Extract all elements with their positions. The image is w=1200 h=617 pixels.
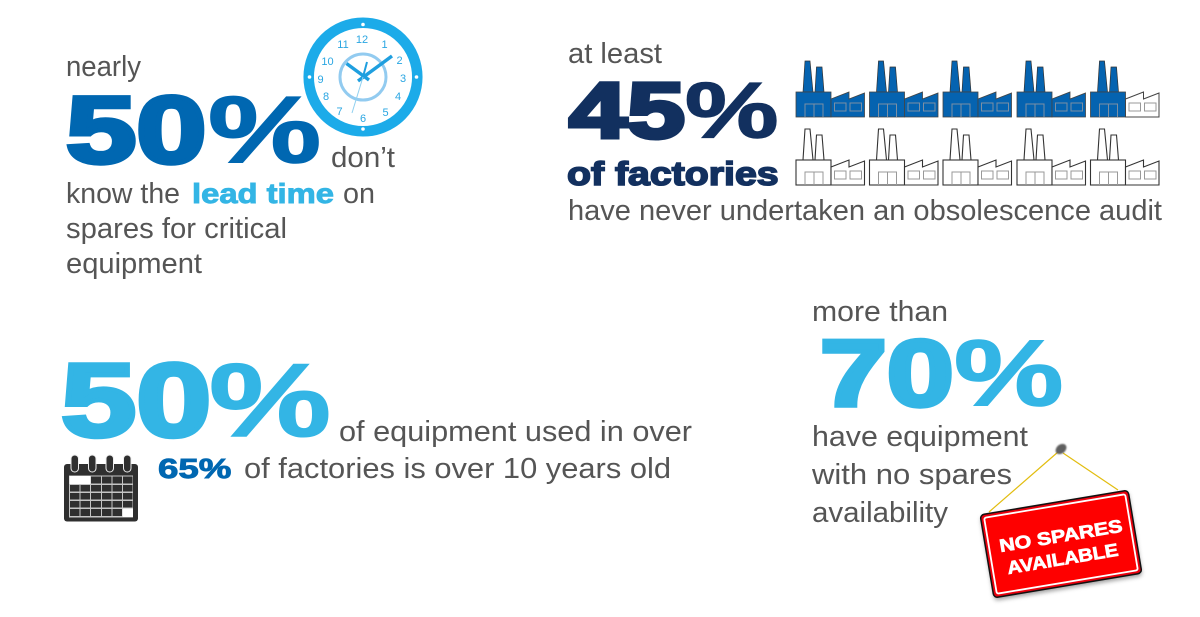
text: don't know the lead time on spares for critical equipment: spares for critical — [66, 213, 287, 245]
text: more than: more than — [812, 296, 948, 328]
icon: clock: 4 — [395, 91, 401, 103]
text: of equipment used in over: of equipment used in over — [339, 416, 692, 448]
icon: clock: 8 — [323, 91, 329, 103]
text: don't know the lead time on spares for critical equipment: know the — [66, 178, 180, 210]
text: 65%: 65% — [158, 452, 231, 484]
text: have equipment with no spares availability: with no spares — [811, 459, 1012, 491]
pictogram: 10 factories, 4.5 filled — [796, 61, 1159, 185]
stat: 50% of equipment over 10 years old — [61, 342, 692, 485]
stat: nearly 50% lead time — [66, 51, 395, 280]
big number: 50% dark blue: % — [208, 76, 321, 183]
big number: 50% dark blue — [66, 76, 321, 183]
icon: clock: 12 — [356, 34, 368, 46]
text: don't know the lead time on spares for critical equipment: on — [343, 178, 375, 210]
icon: clock — [308, 23, 418, 131]
text: have equipment with no spares availability: availability — [812, 497, 948, 529]
icon: clock: 1 — [381, 39, 388, 51]
icon: clock: 5 — [382, 107, 389, 119]
text: don't know the lead time on spares for critical equipment: don’t — [331, 142, 395, 174]
icon: clock: 6 — [360, 113, 366, 125]
big number: 45% navy — [569, 66, 778, 155]
text: don't know the lead time on spares for critical equipment: lead time — [192, 178, 334, 209]
big number: 70% light blue — [820, 320, 1063, 426]
icon: clock: 3 — [400, 73, 406, 85]
big number: 50% light blue: % — [209, 342, 331, 458]
stat: more than 70% no spares — [811, 296, 1063, 529]
icon: clock: 9 — [317, 74, 324, 86]
icon: calendar — [64, 455, 138, 522]
icon: no spares available hanging sign: AVAILABLE — [1006, 541, 1120, 579]
icon: clock: 11 — [337, 39, 349, 51]
text: at least: at least — [568, 38, 662, 70]
icon: no spares available hanging sign — [980, 442, 1142, 601]
text: of factories is over 10 years old: of factories is over 10 years old — [244, 453, 671, 485]
big number: 50% light blue — [61, 342, 331, 458]
big number: 50% dark blue: 50 — [66, 77, 207, 183]
big number: 70% light blue: % — [954, 321, 1063, 426]
icon: clock: 2 — [396, 55, 403, 67]
big number: 45% navy: % — [685, 66, 778, 154]
big number: 70% light blue: 70 — [820, 320, 954, 426]
icon: clock: 10 — [321, 56, 334, 68]
icon: no spares available hanging sign: NO SPARES — [998, 516, 1124, 557]
stat: at least 45% of factories — [567, 38, 1162, 227]
big number: 50% light blue: 50 — [61, 342, 211, 458]
text: don't know the lead time on spares for critical equipment — [66, 142, 395, 280]
text: of factories: of factories — [567, 155, 779, 192]
text: have equipment with no spares availability — [811, 421, 1028, 529]
text: have never undertaken an obsolescence audit: have never undertaken an obsolescence audit — [568, 195, 1162, 227]
text: don't know the lead time on spares for critical equipment: equipment — [66, 248, 202, 280]
big number: 45% navy: 45 — [569, 66, 685, 155]
icon: clock: 7 — [336, 106, 343, 118]
text: have equipment with no spares availability: have equipment — [812, 421, 1028, 453]
text: nearly: nearly — [66, 51, 141, 83]
